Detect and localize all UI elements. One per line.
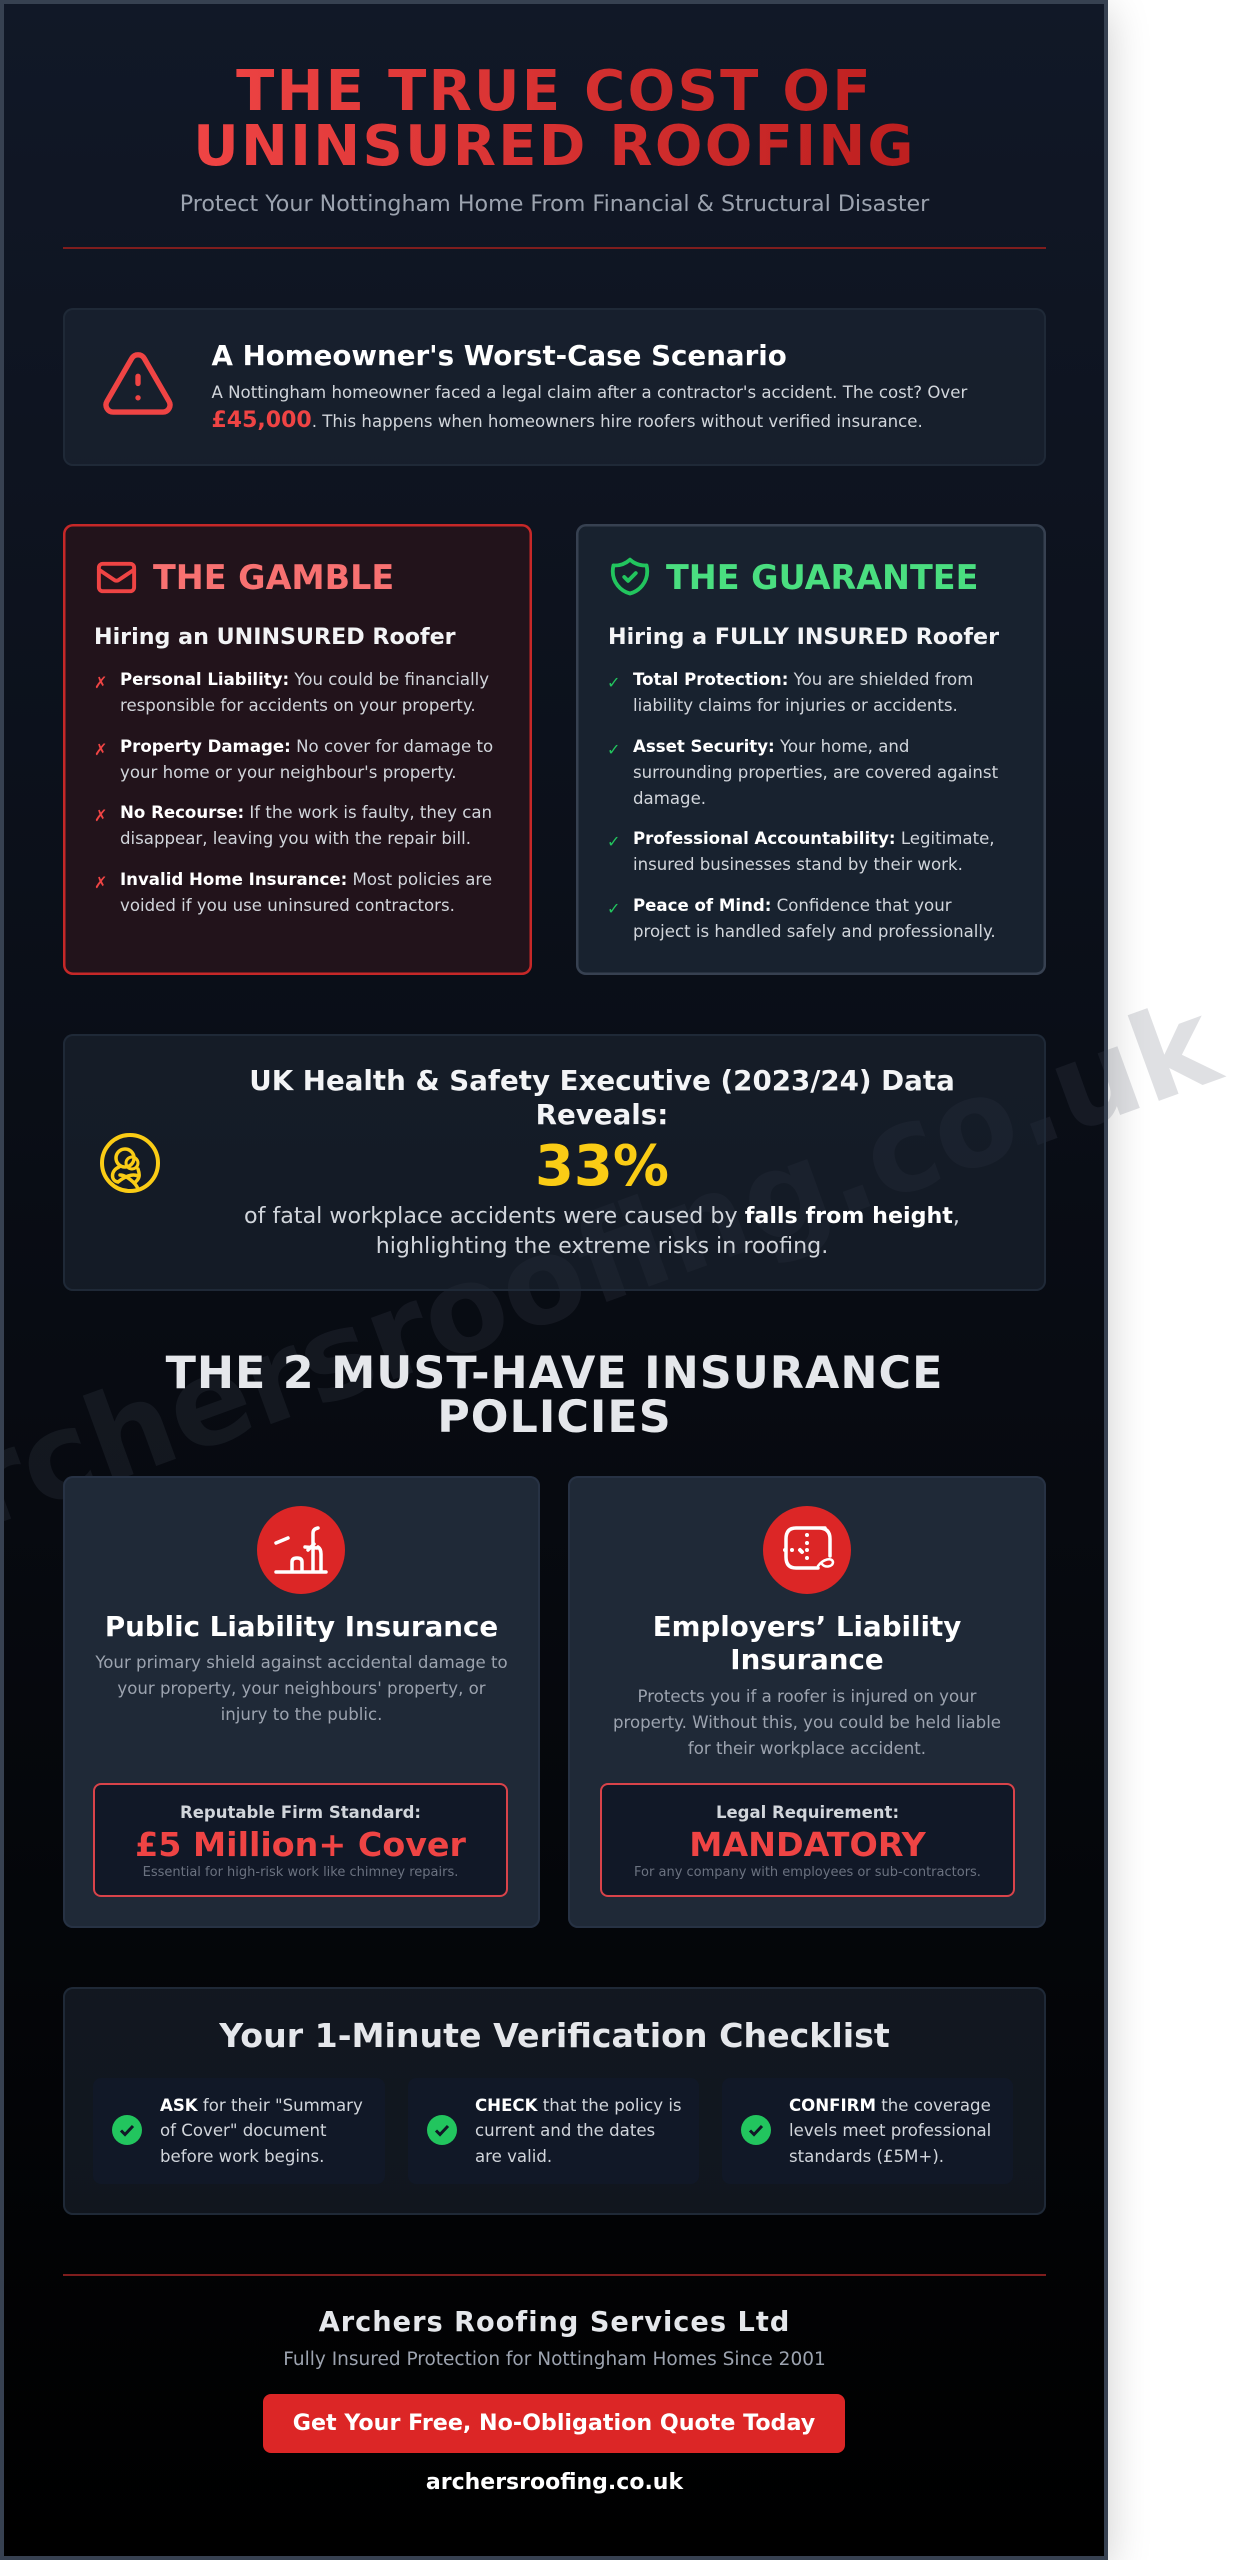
employers' liability description: Protects you if a roofer is injured on your (638, 1687, 976, 1706)
gamble heading: THE GAMBLE (153, 558, 394, 597)
panel: the gamble (63, 524, 532, 975)
public liability description: Your primary shield against accidental damage to (95, 1653, 508, 1672)
item: professional accountability: insured businesses stand by their work. (633, 854, 963, 874)
footer: website: archersroofing.co.uk (426, 2470, 683, 2495)
item: no recourse: ✗ (94, 806, 107, 825)
scenario text: A Nottingham homeowner faced a legal claim after a contractor's accident. The cost? Over (212, 382, 967, 402)
item: invalid home insurance: voided if you use uninsured contractors. (120, 896, 455, 914)
statistic heading (249, 1064, 955, 1131)
item: total protection: liability claims for injuries or accidents. (633, 696, 958, 715)
confirm text: levels meet professional (789, 2121, 991, 2140)
section heading: insurance policies: THE 2 MUST-HAVE INSURANCE (166, 1348, 943, 1399)
item: professional accountability (607, 828, 995, 874)
panel: HSE statistic (63, 1034, 1046, 1291)
item: property damage (94, 736, 493, 782)
check text (475, 2096, 682, 2166)
requirement box (600, 1783, 1015, 1897)
panel: verification checklist (63, 1987, 1046, 2215)
check text: are valid. (475, 2146, 552, 2166)
footer: company name: Archers Roofing Services Ltd (319, 2306, 790, 2338)
ask text: of Cover" document (160, 2121, 326, 2140)
confirm text: standards (£5M+). (789, 2146, 944, 2166)
item: invalid home insurance: ✗ (94, 872, 107, 892)
icon: green check (427, 2115, 457, 2145)
item: property damage: Property Damage: No cover for damage to (120, 736, 493, 756)
guarantee subheading: Hiring a FULLY INSURED Roofer (608, 624, 999, 650)
icon: shield check (610, 558, 650, 596)
panel: worst-case scenario (63, 308, 1046, 466)
requirement box (93, 1783, 508, 1897)
icon: green check (112, 2115, 142, 2145)
item: asset security: ✓ (607, 740, 620, 758)
footer: tagline: Fully Insured Protection for Nottingham Homes Since 2001 (283, 2348, 826, 2370)
item: asset security: damage. (633, 788, 706, 808)
item: property damage: your home or your neighbour's property. (120, 762, 457, 782)
item: property damage: ✗ (94, 740, 107, 758)
title (193, 59, 916, 178)
statistic heading: UK Health & Safety Executive (2023/24) Data (249, 1064, 955, 1097)
checklist item: confirm (722, 2078, 1013, 2184)
item: peace of mind (607, 896, 996, 940)
item: personal liability (94, 670, 489, 715)
item: invalid home insurance: Invalid Home Insurance: Most policies are (120, 870, 492, 888)
box value: MANDATORY (689, 1825, 926, 1864)
box note: For any company with employees or sub-contractors. (634, 1865, 981, 1880)
statistic heading: Reveals: (536, 1098, 668, 1131)
item: no recourse: disappear, leaving you with the repair bill. (120, 829, 471, 848)
item: asset security: Asset Security: Your home, and (633, 736, 909, 756)
item: asset security (607, 736, 998, 808)
ask text: before work begins. (160, 2146, 324, 2166)
statistic text: highlighting the extreme risks in roofing. (376, 1233, 828, 1259)
item: total protection: ✓ (607, 673, 620, 692)
checklist heading: Your 1-Minute Verification Checklist (219, 2016, 890, 2055)
employers' liability description: for their workplace accident. (688, 1739, 926, 1758)
employers' liability title: Employers’ Liability (653, 1610, 961, 1642)
panel: the guarantee (576, 524, 1046, 975)
icon: envelope (96, 562, 136, 594)
box note: Essential for high-risk work like chimney repairs. (143, 1865, 458, 1880)
item: personal liability: ✗ (94, 673, 107, 692)
item: no recourse: No Recourse: If the work is faulty, they can (120, 803, 492, 822)
item: peace of mind: project is handled safely and professionally. (633, 922, 996, 940)
icon: green check (741, 2115, 771, 2145)
panel: employers' liability (568, 1476, 1046, 1928)
check text: CHECK that the policy is (475, 2096, 682, 2114)
box label: Legal Requirement: (716, 1803, 899, 1822)
item: professional accountability: Professional Accountability: Legitimate, (633, 828, 995, 848)
title: THE TRUE COST OF (236, 59, 873, 124)
item: total protection (607, 670, 973, 715)
employers' liability title: Insurance (730, 1643, 884, 1676)
gamble list (94, 670, 493, 914)
item: professional accountability: ✓ (607, 832, 620, 850)
icon: warning triangle (103, 352, 173, 415)
ask text (160, 2096, 363, 2166)
statistic value: 33% (535, 1134, 669, 1199)
public liability title: Public Liability Insurance (105, 1610, 498, 1642)
item: peace of mind: ✓ (607, 898, 620, 918)
item: asset security: surrounding properties, are covered against (633, 762, 998, 782)
guarantee list (607, 670, 998, 940)
employers' liability title (653, 1610, 961, 1676)
public liability description (95, 1653, 508, 1724)
item: total protection: Total Protection: You are shielded from (633, 670, 973, 689)
section heading: insurance policies: POLICIES (437, 1392, 672, 1443)
ask text: ASK for their "Summary (160, 2096, 363, 2114)
item: no recourse (94, 803, 492, 848)
item: peace of mind: Peace of Mind: Confidence that your (633, 896, 952, 914)
icon: person in circle (100, 1133, 160, 1193)
employers' liability description: property. Without this, you could be held liable (613, 1713, 1001, 1732)
item: personal liability: responsible for accidents on your property. (120, 696, 476, 715)
check text: current and the dates (475, 2121, 655, 2140)
public liability description: your property, your neighbours' property, or (117, 1679, 486, 1698)
checklist item: check (408, 2078, 699, 2184)
public liability description: injury to the public. (221, 1705, 382, 1724)
item: personal liability: Personal Liability: You could be financially (120, 670, 489, 689)
scenario text (212, 382, 968, 432)
icon: rounded square in red circle (763, 1506, 851, 1594)
checklist item: ask (93, 2078, 385, 2184)
confirm text (789, 2096, 991, 2166)
gamble subheading: Hiring an UNINSURED Roofer (94, 624, 456, 650)
call-to-action button (263, 2394, 845, 2453)
guarantee heading: THE GUARANTEE (666, 558, 978, 597)
box value: £5 Million+ Cover (135, 1825, 466, 1864)
call-to-action button: Get Your Free, No-Obligation Quote Today (293, 2410, 815, 2436)
icon: building in red circle (257, 1506, 345, 1594)
scenario text: £45,000. This happens when homeowners hire roofers without verified insurance. (212, 408, 923, 432)
title: UNINSURED ROOFING (193, 114, 916, 178)
statistic text: of fatal workplace accidents were caused by falls from height, (244, 1203, 960, 1229)
panel: public liability (63, 1476, 540, 1928)
employers' liability description (613, 1687, 1001, 1758)
box label: Reputable Firm Standard: (180, 1803, 421, 1822)
subtitle: Protect Your Nottingham Home From Financial & Structural Disaster (180, 191, 929, 217)
section heading: insurance policies (166, 1348, 943, 1443)
confirm text: CONFIRM the coverage (789, 2096, 991, 2114)
scenario heading: A Homeowner's Worst-Case Scenario (212, 338, 787, 372)
item: invalid home insurance (94, 870, 492, 914)
statistic text (244, 1203, 960, 1259)
